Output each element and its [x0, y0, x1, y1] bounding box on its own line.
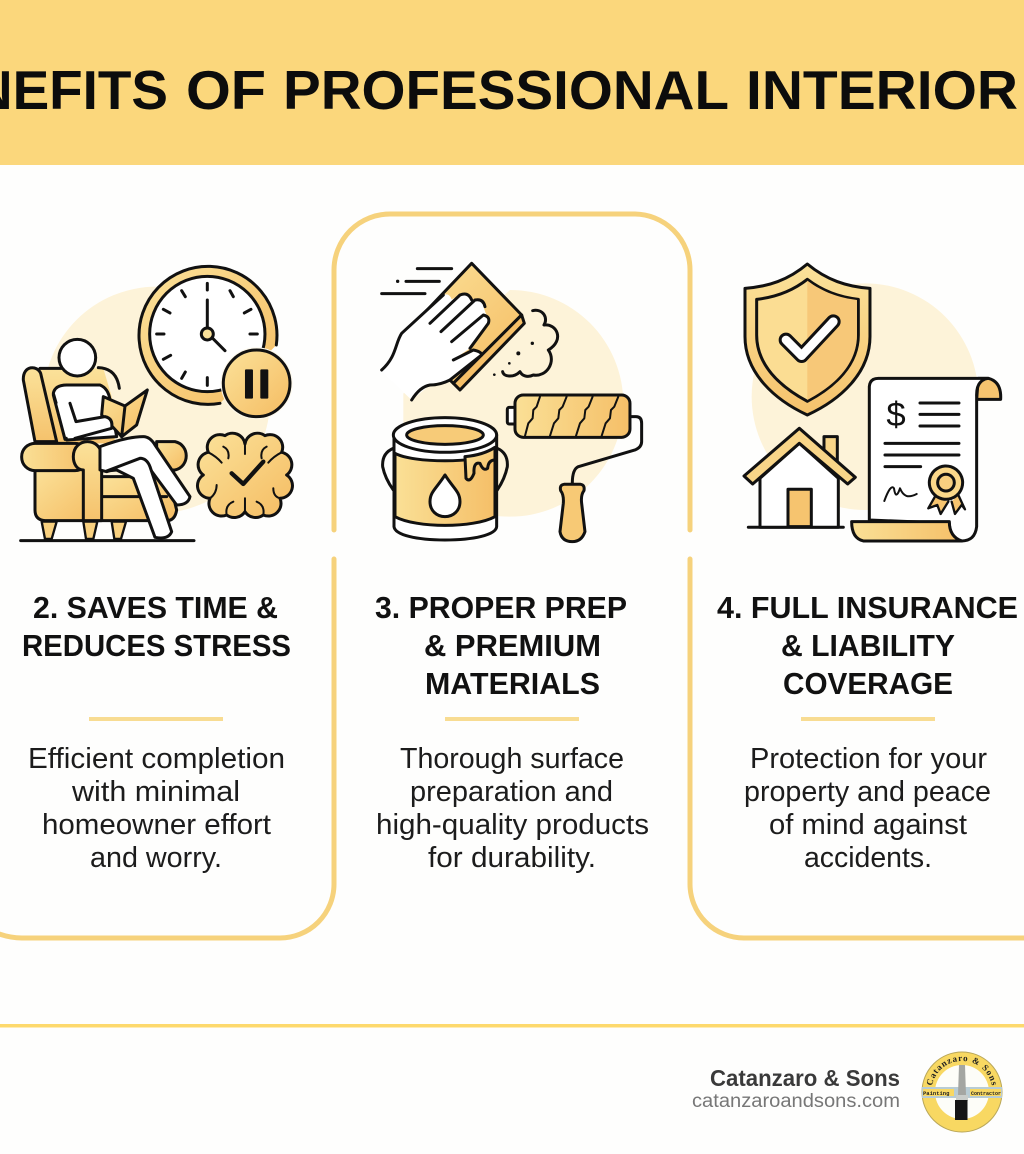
footer brand text: Catanzaro & Sons [710, 1065, 900, 1091]
column 4 heading: 4. FULL INSURANCE [717, 590, 1018, 625]
column 3 description [376, 743, 649, 874]
house [744, 428, 855, 527]
icon: sponge, paint can and roller [382, 263, 642, 542]
sanding sponge and hand [382, 263, 524, 400]
brain with check [197, 433, 292, 518]
column 4 description: of mind against [769, 809, 967, 841]
title: INTERIOR [746, 59, 1018, 121]
column 3 description: high-quality products [376, 809, 649, 841]
panel: proper prep outline [334, 214, 690, 530]
header banner [0, 0, 1024, 165]
column 2 description: with minimal [71, 776, 240, 808]
column 3 heading: MATERIALS [425, 666, 600, 701]
column 2 heading [22, 590, 291, 663]
column 4 heading: COVERAGE [783, 666, 953, 701]
column 3 heading: 3. PROPER PREP [375, 590, 627, 625]
column 2 heading: 2. SAVES TIME & [33, 590, 278, 625]
column 4 description: accidents. [804, 842, 932, 874]
pause badge [221, 347, 293, 419]
column 2 description: and worry. [90, 842, 222, 874]
column 3 heading [375, 590, 627, 701]
armchair [21, 368, 194, 541]
column 4 description [744, 743, 991, 874]
column 4 heading [717, 590, 1018, 701]
column 2 heading: REDUCES STRESS [22, 628, 291, 663]
logo: Catanzaro & Sons [926, 1056, 996, 1086]
shield with check [745, 264, 870, 415]
column 2 description: homeowner effort [42, 809, 271, 841]
column 3 description: Thorough surface [400, 743, 624, 775]
title: PROFESSIONAL [283, 59, 729, 121]
insurance document: $ [886, 396, 906, 434]
column 4 heading: & LIABILITY [781, 628, 955, 663]
icon: relaxing person with clock and brain [21, 266, 293, 541]
logo: Contractor [971, 1091, 1001, 1097]
insurance document [852, 378, 1001, 541]
column 3 description: preparation and [410, 776, 613, 808]
column 4 description: property and peace [744, 776, 991, 808]
panel: saves time outline [0, 559, 334, 938]
paint can [383, 418, 507, 540]
dust cloud [493, 310, 558, 376]
footer brand text: catanzaroandsons.com [692, 1091, 900, 1112]
logo: Painting [923, 1090, 949, 1097]
column 2 description: Efficient completion [28, 743, 285, 775]
person reading a book [53, 339, 190, 538]
title: OF [186, 59, 266, 121]
title [0, 59, 1018, 121]
footer brand text [692, 1065, 900, 1112]
logo [922, 1052, 1002, 1132]
panel: insurance outline [690, 559, 1024, 938]
column 2 description [28, 743, 285, 874]
column 3 heading: & PREMIUM [424, 628, 601, 663]
paint roller [507, 395, 642, 542]
icon: shield, house and insurance document [744, 264, 1001, 541]
column 3 description: for durability. [428, 842, 596, 874]
column 4 description: Protection for your [750, 743, 987, 775]
